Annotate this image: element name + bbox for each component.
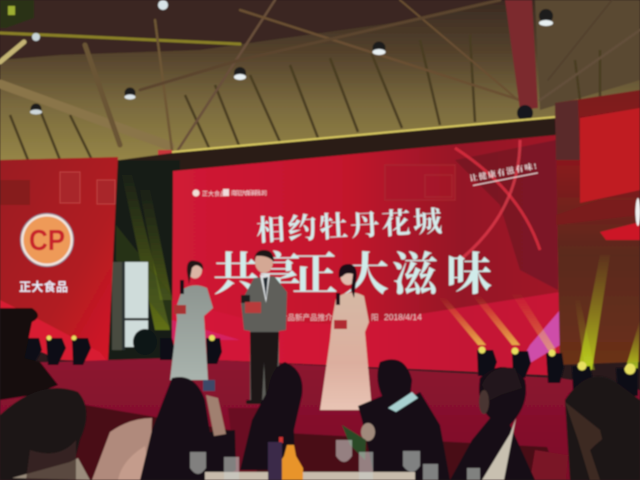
title line 2: 共享正大滋味 [213,249,492,300]
ceiling [0,0,640,175]
panel: main LED screen: 阳 [371,313,378,322]
slogan top right: 让健康有滋有味! [469,161,537,183]
guest: right foreground [565,376,640,480]
golden wash lights [172,117,555,152]
chair backs [92,418,152,480]
podium dark shape [0,308,38,360]
icon: CP logo [20,214,74,266]
central red column [505,0,538,110]
panel: right LED screen [555,90,640,370]
host: woman in pink gown [320,264,372,410]
host: woman in grey gown [170,260,213,380]
logo row: 正大食品 [202,190,226,198]
event line: 食品新产品推介大会 [280,312,348,322]
wine glasses [190,440,480,480]
ceiling lamps [30,0,553,121]
stage front edge [60,405,560,480]
guest: woman in black [240,362,302,470]
stage lights [0,308,638,396]
panel: main LED screen [172,135,560,376]
panel: left LED screen [0,157,118,362]
host: man in grey suit [241,250,287,404]
logo row [192,189,267,198]
dark column with green beams and window [108,160,180,365]
guest: woman with long hair photographing [140,377,236,480]
orange juice bottle [276,445,303,480]
dark lintel [120,118,560,175]
title line 1: 相约牡丹花城 [255,205,443,248]
audience [0,352,640,480]
table [190,437,480,480]
brand name: 正大食品 [19,279,68,294]
guest: man in varsity jacket [450,367,535,480]
guest: foreground left [0,352,90,480]
guest: man in black hoodie [342,359,450,480]
carpeted stage [0,358,640,480]
truss beams [0,0,640,150]
spot beams [438,297,486,345]
date: 2018/4/14 [384,312,422,322]
icon: CP logo: CP [29,225,65,257]
logo row: 南京正大食品有限公司 [231,189,267,197]
